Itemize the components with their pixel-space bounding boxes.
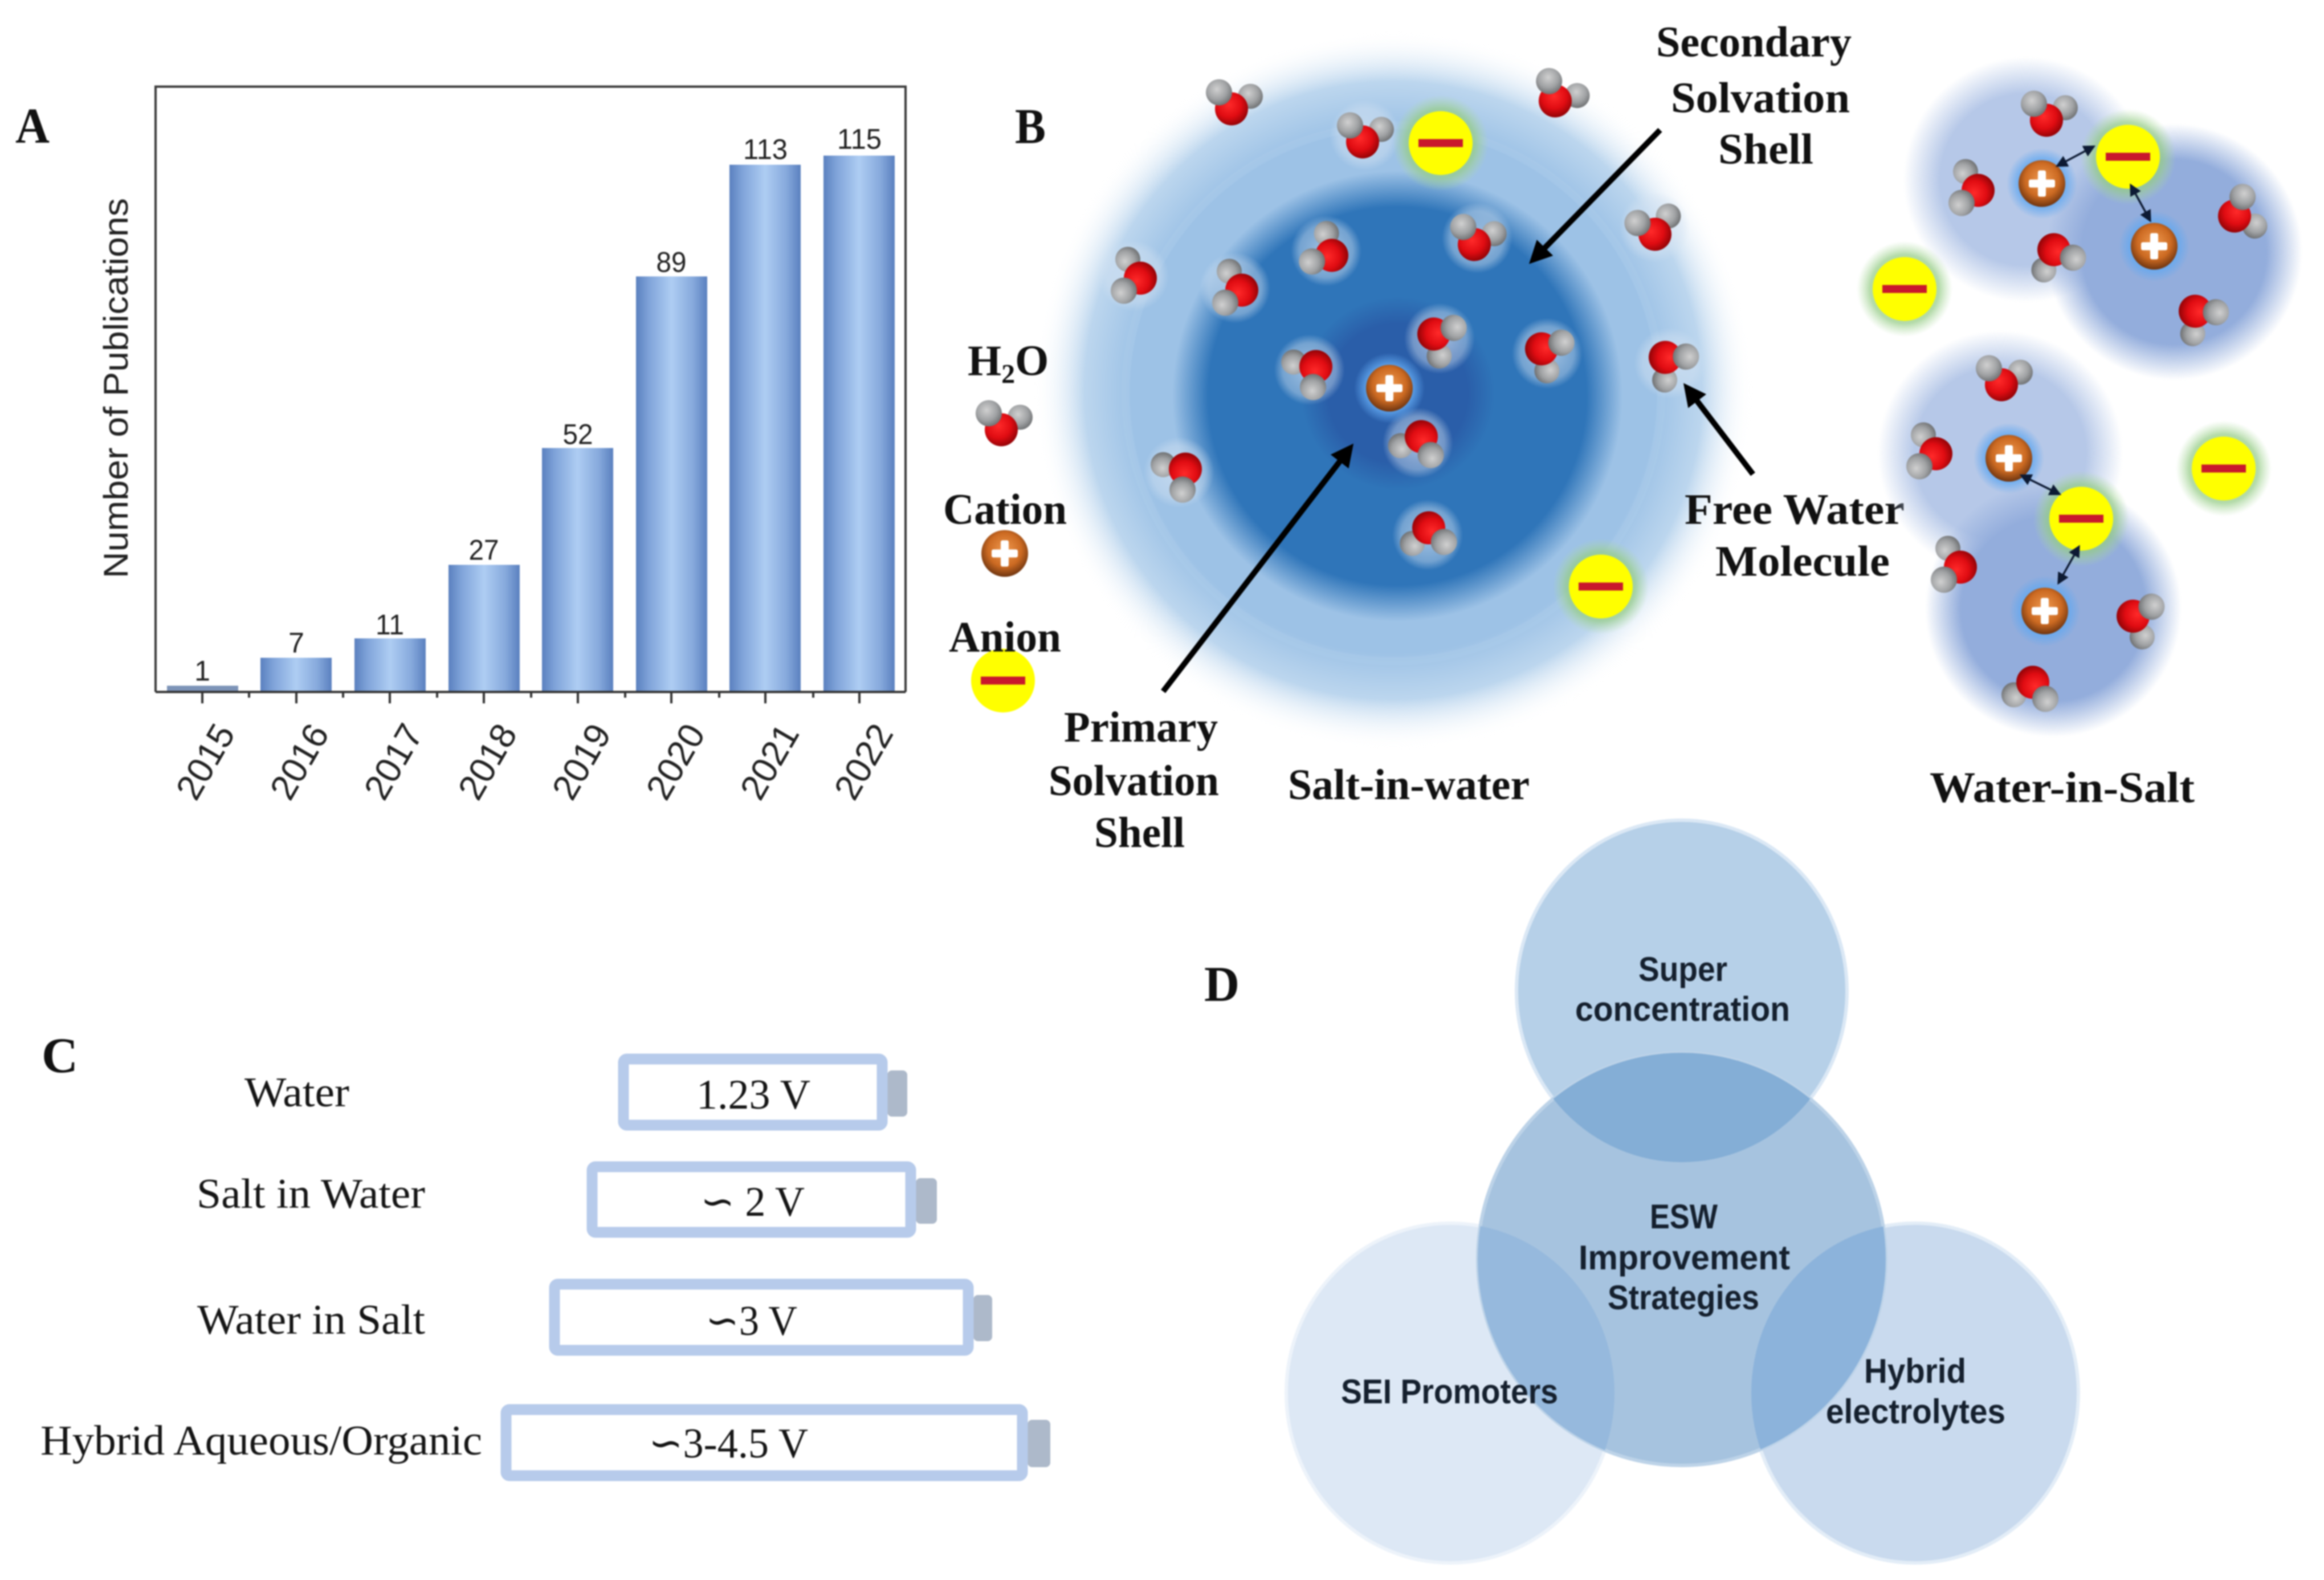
label: free water molecule: [1685, 486, 1905, 585]
arrow: primary solvation shell: [1163, 448, 1350, 691]
text: hybrid electrolytes: electrolytes: [1826, 1392, 2005, 1431]
label: secondary solvation shell: [1656, 18, 1852, 173]
row: water: [244, 1059, 907, 1125]
label: secondary solvation shell: Secondary: [1656, 18, 1852, 66]
central cation: [1354, 353, 1425, 423]
value labels: [194, 123, 882, 687]
row: hybrid aqueous/organic: Hybrid Aqueous/Organic: [40, 1418, 482, 1464]
heading: panel letter C: C: [42, 1028, 78, 1084]
text: super concentration: [1575, 950, 1790, 1028]
label: primary solvation shell: Solvation: [1049, 757, 1219, 805]
panel D: ESW improvement strategies venn: [1204, 820, 2078, 1563]
legend: anion: [949, 613, 1061, 712]
bar 2018: [449, 565, 520, 692]
y axis title: Number of Publications: [97, 198, 135, 578]
text: hybrid electrolytes: [1826, 1352, 2005, 1431]
year labels: 2021: [733, 717, 807, 807]
overlap regions: [1478, 1053, 1886, 1465]
anion lower: [1553, 539, 1649, 634]
value labels: 27: [468, 534, 499, 566]
year labels: 2017: [357, 717, 431, 807]
year labels: 2016: [263, 717, 337, 807]
label: salt-in-water: Salt-in-water: [1288, 761, 1530, 809]
text: ESW improvement strategies: Improvement: [1579, 1239, 1790, 1277]
year labels: 2019: [545, 717, 619, 807]
legend: H2O: O: [1015, 337, 1049, 385]
row: water in salt: Water in Salt: [197, 1297, 425, 1343]
row: hybrid aqueous/organic: [40, 1410, 1050, 1476]
row: salt in water: Salt in Water: [197, 1171, 425, 1217]
heading: panel letter A: A: [15, 99, 50, 154]
ion-pair double arrows: [2021, 146, 2150, 583]
year labels: 2020: [639, 717, 713, 807]
text: super concentration: concentration: [1575, 990, 1790, 1028]
bar 2022: [823, 156, 895, 692]
year labels: 2015: [169, 717, 243, 807]
row: water: Water: [244, 1069, 349, 1116]
row: hybrid aqueous/organic: ∽3-4.5 V: [649, 1420, 808, 1467]
row: salt in water: [197, 1167, 937, 1232]
salt-in-water solvation shells: [1034, 31, 1752, 750]
row: salt in water: ∽ 2 V: [700, 1179, 805, 1225]
x axis with ticks: [156, 692, 906, 703]
heading: panel letter B: B: [1015, 99, 1046, 154]
legend: cation: Cation: [943, 486, 1067, 534]
label: water-in-salt: Water-in-Salt: [1930, 764, 2195, 812]
row: water in salt: [197, 1284, 992, 1350]
label: free water molecule: Free Water: [1685, 486, 1905, 534]
bar 2020: [636, 276, 707, 692]
value labels: 113: [743, 133, 788, 165]
cations in water-in-salt: [1974, 148, 2190, 646]
legend: H2O: H: [968, 337, 1001, 385]
text: super concentration: Super: [1638, 950, 1727, 988]
label: primary solvation shell: Shell: [1094, 809, 1185, 857]
value labels: 115: [837, 123, 882, 155]
value labels: 1: [194, 655, 210, 687]
value labels: 89: [657, 246, 686, 278]
legend: cation: [943, 486, 1067, 577]
year labels: 2022: [827, 717, 901, 807]
panel B: solvation structure diagram: [943, 18, 2302, 857]
label: secondary solvation shell: Solvation: [1671, 74, 1850, 122]
bar 2019: [542, 448, 613, 692]
legend: H2O: 2: [1001, 359, 1015, 389]
panel A: publications bar chart: [15, 87, 906, 807]
label: free water molecule: Molecule: [1715, 537, 1890, 585]
text: ESW improvement strategies: Strategies: [1608, 1278, 1759, 1317]
label: secondary solvation shell: Shell: [1718, 125, 1813, 173]
bar 2015: [167, 686, 238, 692]
anions in water-in-salt: [1857, 109, 2272, 567]
text: ESW improvement strategies: ESW: [1650, 1198, 1718, 1236]
label: primary solvation shell: [1049, 703, 1219, 857]
value labels: 52: [563, 418, 593, 450]
row: water in salt: ∽3 V: [706, 1298, 797, 1345]
circle: ESW improvement strategies: [1478, 1053, 1886, 1465]
panel C: voltage windows: [40, 1028, 1050, 1476]
year labels: [169, 717, 901, 807]
circle: SEI promoters: [1286, 1223, 1614, 1563]
text: hybrid electrolytes: Hybrid: [1864, 1352, 1966, 1390]
label: primary solvation shell: Primary: [1064, 703, 1218, 751]
water molecules in salt-in-water: [1098, 64, 1719, 576]
circle: hybrid electrolytes: [1751, 1223, 2078, 1563]
bar 2017: [354, 638, 426, 692]
value labels: 7: [288, 627, 304, 659]
text: SEI promoters: SEI Promoters: [1341, 1373, 1558, 1411]
arrow: free water molecule: [1687, 388, 1753, 474]
water-in-salt clusters: [1878, 57, 2302, 737]
legend: anion: Anion: [949, 613, 1061, 661]
bar 2016: [260, 658, 332, 692]
text: ESW improvement strategies: [1579, 1198, 1790, 1317]
value labels: 11: [376, 609, 404, 641]
row: water: 1.23 V: [696, 1072, 810, 1118]
water molecules in water-in-salt: [1906, 91, 2276, 712]
anion upper: [1393, 95, 1489, 191]
circle: super concentration: [1516, 820, 1847, 1162]
heading: panel letter D: D: [1204, 957, 1240, 1012]
year labels: 2018: [451, 717, 525, 807]
chart frame: [156, 87, 906, 692]
arrow: secondary solvation shell: [1533, 130, 1660, 260]
bar 2021: [729, 165, 801, 692]
legend: H2O: [968, 337, 1049, 446]
